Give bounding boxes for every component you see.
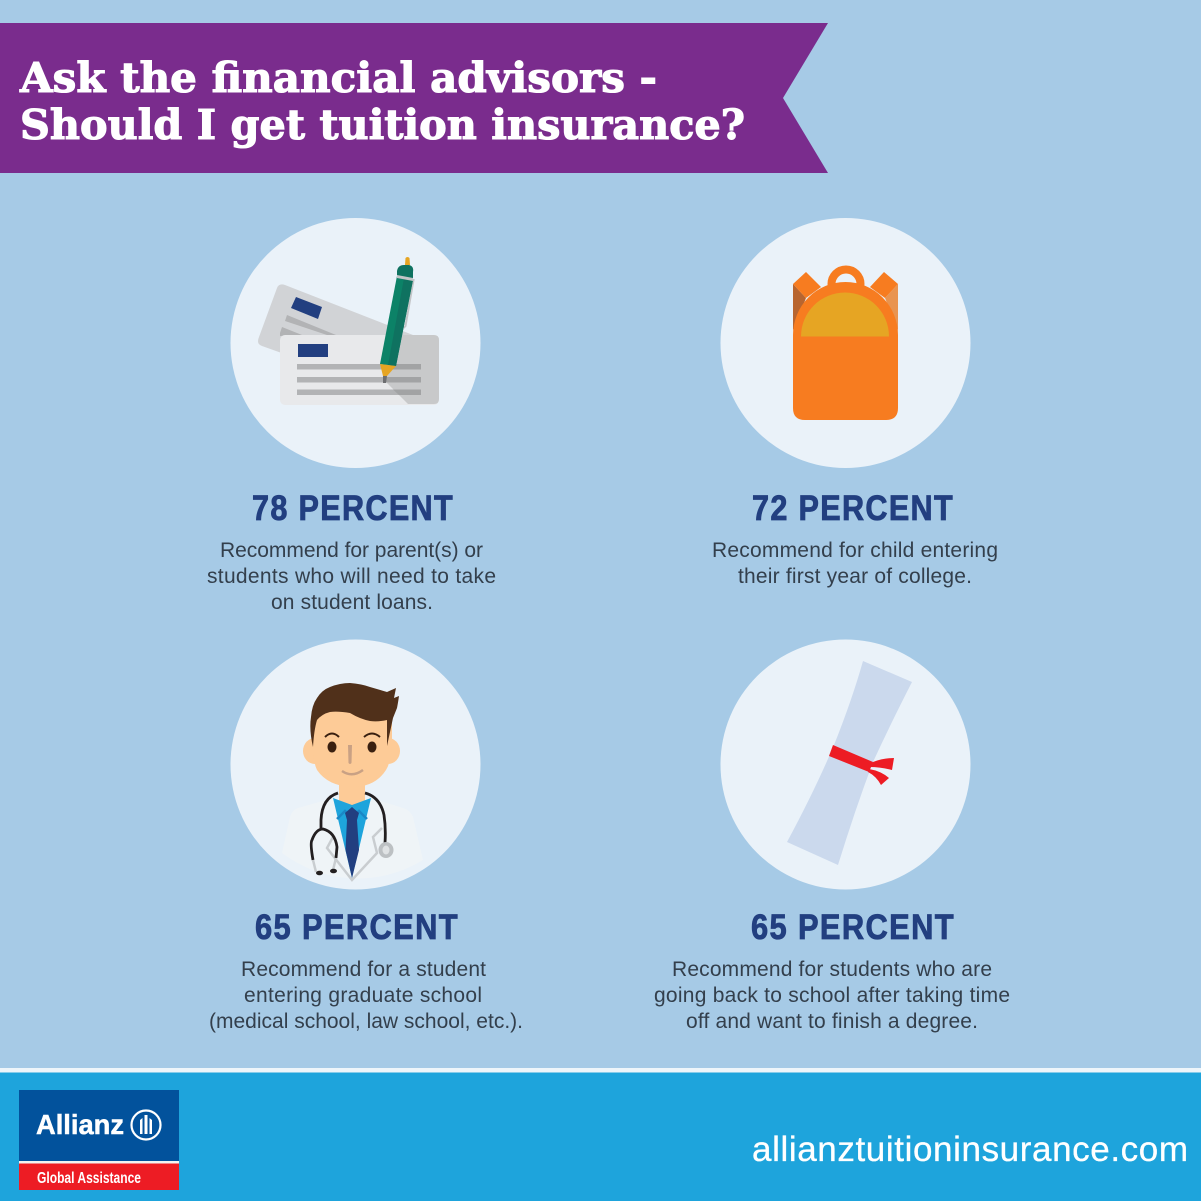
face: [313, 710, 392, 787]
description: students who will need to take: [207, 565, 496, 588]
icon: diploma: [720, 640, 970, 890]
description: [654, 958, 1010, 1033]
description: [712, 539, 998, 588]
description: going back to school after taking time: [654, 984, 1010, 1007]
heading: 65 PERCENT: [255, 908, 459, 947]
title: Should I get tuition insurance?: [20, 101, 745, 149]
nose and mouth: [342, 745, 363, 774]
eyes: [325, 734, 380, 752]
title: Ask the financial advisors -: [19, 54, 657, 102]
shirt and tie: [333, 798, 371, 878]
icon: checks and pen: [230, 218, 480, 468]
coat: [282, 798, 423, 878]
title banner: [0, 23, 828, 173]
pen: [380, 257, 414, 383]
description: Recommend for parent(s) or: [220, 539, 483, 562]
heading: 78 PERCENT: [252, 489, 454, 528]
description: [207, 539, 496, 614]
ears: [303, 738, 400, 764]
website url: allianztuitioninsurance.com: [752, 1130, 1188, 1169]
footer: [0, 1068, 1201, 1201]
description: off and want to finish a degree.: [686, 1010, 978, 1033]
hair: [310, 683, 399, 747]
description: on student loans.: [271, 591, 433, 614]
description: Recommend for students who are: [672, 958, 992, 981]
heading: 72 PERCENT: [752, 489, 954, 528]
logo: Allianz Global Assistance: Allianz: [36, 1109, 124, 1140]
logo: Allianz Global Assistance: Global Assistance: [37, 1170, 141, 1187]
back check: [258, 284, 413, 356]
description: [209, 958, 523, 1033]
title: [19, 54, 745, 149]
description: Recommend for a student: [241, 958, 486, 981]
description: (medical school, law school, etc.).: [209, 1010, 523, 1033]
description: entering graduate school: [244, 984, 482, 1007]
neck: [339, 775, 365, 805]
logo: Allianz Global Assistance: [19, 1090, 179, 1190]
description: their first year of college.: [738, 565, 972, 588]
panel: 65 percent graduate school: [209, 640, 523, 1033]
stethoscope: [311, 793, 394, 875]
description: Recommend for child entering: [712, 539, 998, 562]
icon: backpack: [720, 218, 970, 468]
panel: 78 percent loans: [207, 218, 496, 614]
panel: 72 percent first year: [712, 218, 998, 588]
lapel: [327, 828, 382, 880]
front check: [280, 335, 439, 405]
icon: doctor: [230, 640, 480, 890]
heading: 65 PERCENT: [751, 908, 955, 947]
panel: 65 percent returning students: [654, 640, 1010, 1033]
